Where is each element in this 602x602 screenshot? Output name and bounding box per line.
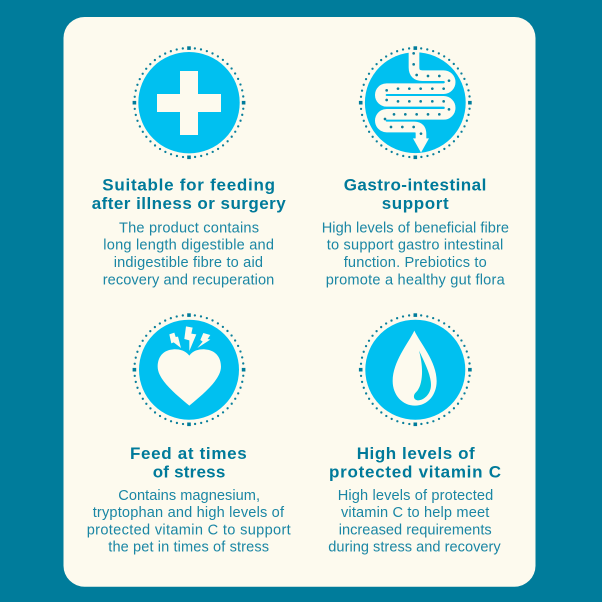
heading: suitable for feeding: Suitable for feeding xyxy=(102,176,275,195)
text: suitable for feeding description: long length digestible and xyxy=(103,238,274,254)
heading: feed at times of stress: of stress xyxy=(153,463,225,482)
text: vitamin C description xyxy=(328,488,501,556)
text: gastro-intestinal description: High levels of beneficial fibre xyxy=(322,220,509,236)
icon: intestine xyxy=(359,46,472,159)
text: suitable for feeding description: recovery and recuperation xyxy=(103,272,274,288)
text: vitamin C description: High levels of protected xyxy=(338,488,493,504)
heading: high levels of protected vitamin C: protected vitamin C xyxy=(329,463,501,482)
text: stress description: tryptophan and high levels of xyxy=(93,505,285,521)
panel: feed at times of stress xyxy=(87,313,291,556)
icon: water drop xyxy=(359,313,472,426)
text: gastro-intestinal description: promote a healthy gut flora xyxy=(326,272,506,288)
heading: feed at times of stress xyxy=(130,444,247,482)
text: stress description: the pet in times of stress xyxy=(108,540,269,556)
text: gastro-intestinal description xyxy=(322,220,509,288)
icon: heart with lightning xyxy=(133,313,245,426)
heading: high levels of protected vitamin C: High levels of xyxy=(357,444,475,463)
panel: suitable for feeding xyxy=(92,46,286,288)
panel: gastro-intestinal support xyxy=(322,46,509,288)
text: vitamin C description: increased requirements xyxy=(339,522,492,538)
text: stress description: Contains magnesium, xyxy=(118,488,260,504)
text: suitable for feeding description: indigestible fibre to aid xyxy=(114,255,263,271)
icon: medical cross xyxy=(133,46,245,159)
text: suitable for feeding description: The product contains xyxy=(119,220,259,236)
heading: gastro-intestinal support: support xyxy=(382,194,449,213)
heading: feed at times of stress: Feed at times xyxy=(130,444,247,463)
panel: card xyxy=(64,17,536,587)
text: stress description: protected vitamin C to support xyxy=(87,522,291,538)
text: vitamin C description: during stress and recovery xyxy=(328,540,501,556)
text: gastro-intestinal description: to support gastro intestinal xyxy=(327,238,503,254)
heading: gastro-intestinal support: Gastro-intestinal xyxy=(344,176,486,195)
panel: protected vitamin C xyxy=(328,313,501,556)
heading: gastro-intestinal support xyxy=(344,176,486,213)
text: gastro-intestinal description: function. Prebiotics to xyxy=(344,255,487,271)
heading: suitable for feeding xyxy=(92,176,286,213)
text: vitamin C description: vitamin C to help meet xyxy=(341,505,489,521)
heading: suitable for feeding: after illness or surgery xyxy=(92,194,286,213)
text: stress description xyxy=(87,488,291,556)
text: suitable for feeding description xyxy=(103,220,274,288)
heading: high levels of protected vitamin C xyxy=(329,444,501,482)
